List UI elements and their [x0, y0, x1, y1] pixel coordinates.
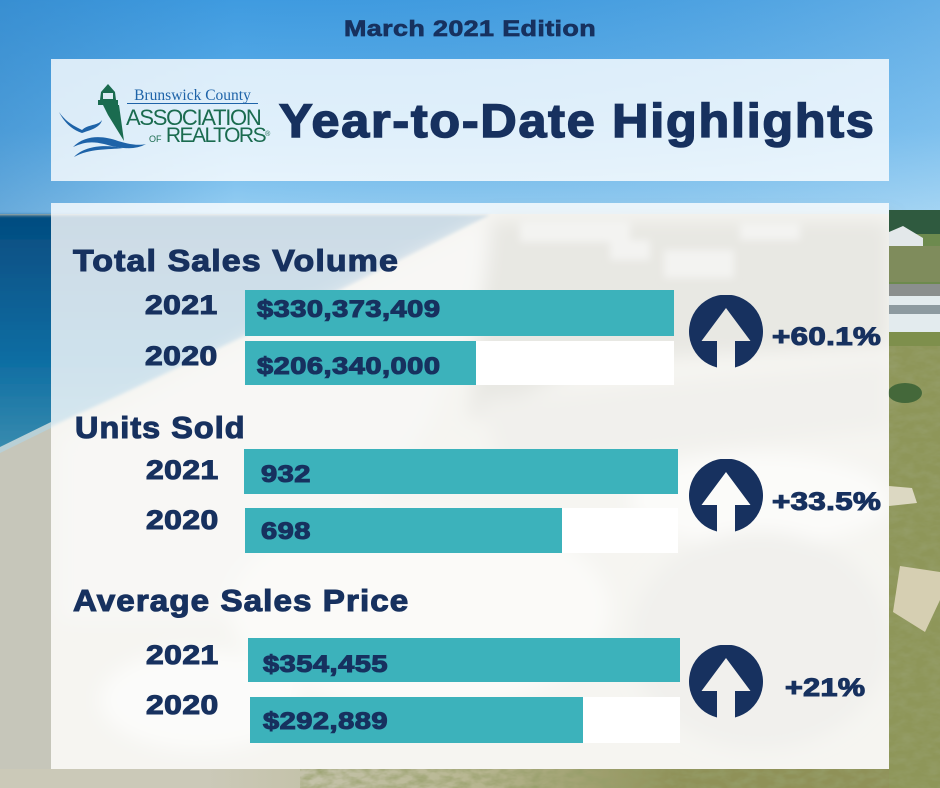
heading: Average Sales Price	[73, 583, 409, 618]
left beach strip	[0, 428, 51, 788]
bar 2020	[245, 341, 476, 385]
icon: up arrow	[689, 459, 763, 532]
bar 2020 track	[245, 508, 678, 553]
icon: up arrow	[689, 645, 763, 718]
logo text: of Realtors: OF REALTORS®	[149, 124, 270, 147]
logo text: Brunswick County: Brunswick County	[134, 87, 251, 104]
edition label: March 2021 Edition	[344, 16, 596, 41]
year label 2020: 2020	[146, 690, 219, 720]
section: Total Sales Volume	[72, 243, 881, 385]
bar 2021	[245, 290, 674, 336]
faint houses	[520, 220, 800, 278]
heading: Units Sold	[75, 410, 246, 445]
panel: main	[51, 203, 889, 769]
bar 2020 track	[245, 341, 674, 385]
bar 2020 track	[250, 697, 680, 743]
percent change: +60.1%	[772, 323, 881, 351]
section: Units Sold	[75, 410, 881, 553]
section: Average Sales Price	[73, 583, 865, 743]
icon: lighthouse, gull and waves	[59, 84, 146, 157]
icon: up arrow	[689, 295, 763, 368]
logo text: Association: ASSOCIATION	[126, 105, 260, 130]
logo: Brunswick County Association of Realtors	[59, 84, 270, 157]
year label 2020: 2020	[145, 341, 218, 371]
value 2021: $330,373,409	[257, 296, 440, 323]
year label 2021: 2021	[146, 455, 219, 485]
heading: Total Sales Volume	[73, 243, 399, 278]
panel: header	[51, 59, 889, 181]
value 2020: $292,889	[263, 708, 388, 735]
year label 2021: 2021	[145, 290, 218, 320]
bar 2020	[250, 697, 583, 743]
title: Year-to-Date Highlights	[279, 94, 876, 147]
bottom strip	[0, 769, 940, 788]
percent change: +21%	[785, 674, 865, 702]
year label 2021: 2021	[146, 640, 219, 670]
percent change: +33.5%	[772, 488, 881, 516]
value 2021: $354,455	[263, 651, 388, 678]
value 2021: 932	[261, 461, 311, 488]
bar 2021	[244, 449, 678, 494]
right strip	[889, 335, 940, 788]
value 2020: 698	[261, 518, 311, 545]
value 2020: $206,340,000	[257, 353, 440, 380]
bar 2020	[245, 508, 562, 553]
year label 2020: 2020	[146, 505, 219, 535]
bar 2021	[248, 638, 680, 682]
